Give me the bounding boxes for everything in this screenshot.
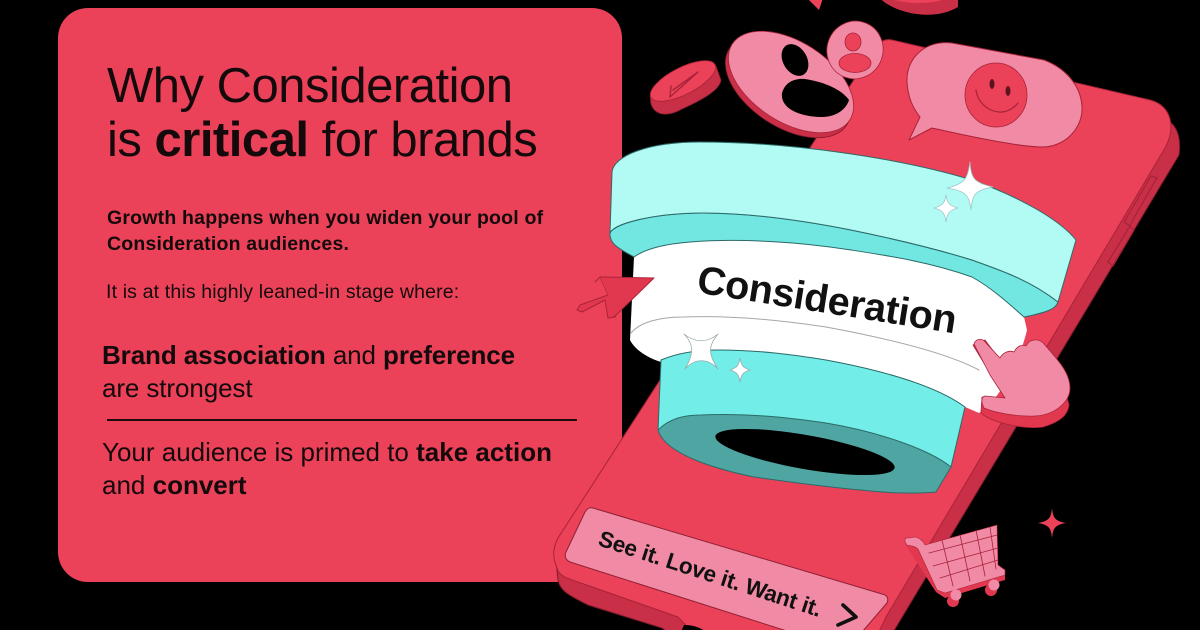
icon: shopping cart <box>905 525 1005 607</box>
icon: red sparkle <box>1038 508 1066 538</box>
icon: sparkles on funnel top <box>934 162 993 222</box>
icon: check coin <box>645 53 721 114</box>
call to action bar: See it. Love it. Want it. <box>595 526 825 622</box>
icon: sparkles on funnel bottom <box>684 334 750 382</box>
intro text: Growth happens when you widen your pool of <box>107 207 543 229</box>
funnel: lower teal band <box>658 350 965 493</box>
icon: profile badge <box>819 13 891 87</box>
intro text: Consideration audiences. <box>107 233 349 255</box>
heading: Why Consideration <box>107 59 512 113</box>
point: take action: Your audience is primed to take action <box>102 437 552 467</box>
icon: smiley speech bubble <box>907 43 1082 147</box>
intro text <box>107 207 544 255</box>
call to action bar <box>565 508 888 630</box>
icon: pointing hand <box>973 339 1070 428</box>
point: brand association: are strongest <box>102 373 252 403</box>
stage statement: It is at this highly leaned-in stage where: <box>106 281 459 303</box>
funnel: white Consideration band <box>630 240 1027 413</box>
heading: is critical for brands <box>107 113 537 167</box>
icon: face coin <box>708 10 871 159</box>
icon: arrow cursor <box>577 277 654 318</box>
funnel: top band <box>610 142 1076 302</box>
point: take action <box>102 437 552 500</box>
funnel <box>610 142 1076 493</box>
point: brand association <box>102 340 515 403</box>
point: brand association: Brand association and preference <box>102 340 515 370</box>
heading <box>107 59 537 167</box>
funnel: lip band <box>610 213 1058 317</box>
panel: text card <box>58 8 622 582</box>
floating coin top <box>807 0 958 15</box>
divider line <box>107 419 577 421</box>
point: take action: and convert <box>102 470 247 500</box>
funnel label: Consideration <box>694 258 960 342</box>
phone <box>554 40 1180 630</box>
